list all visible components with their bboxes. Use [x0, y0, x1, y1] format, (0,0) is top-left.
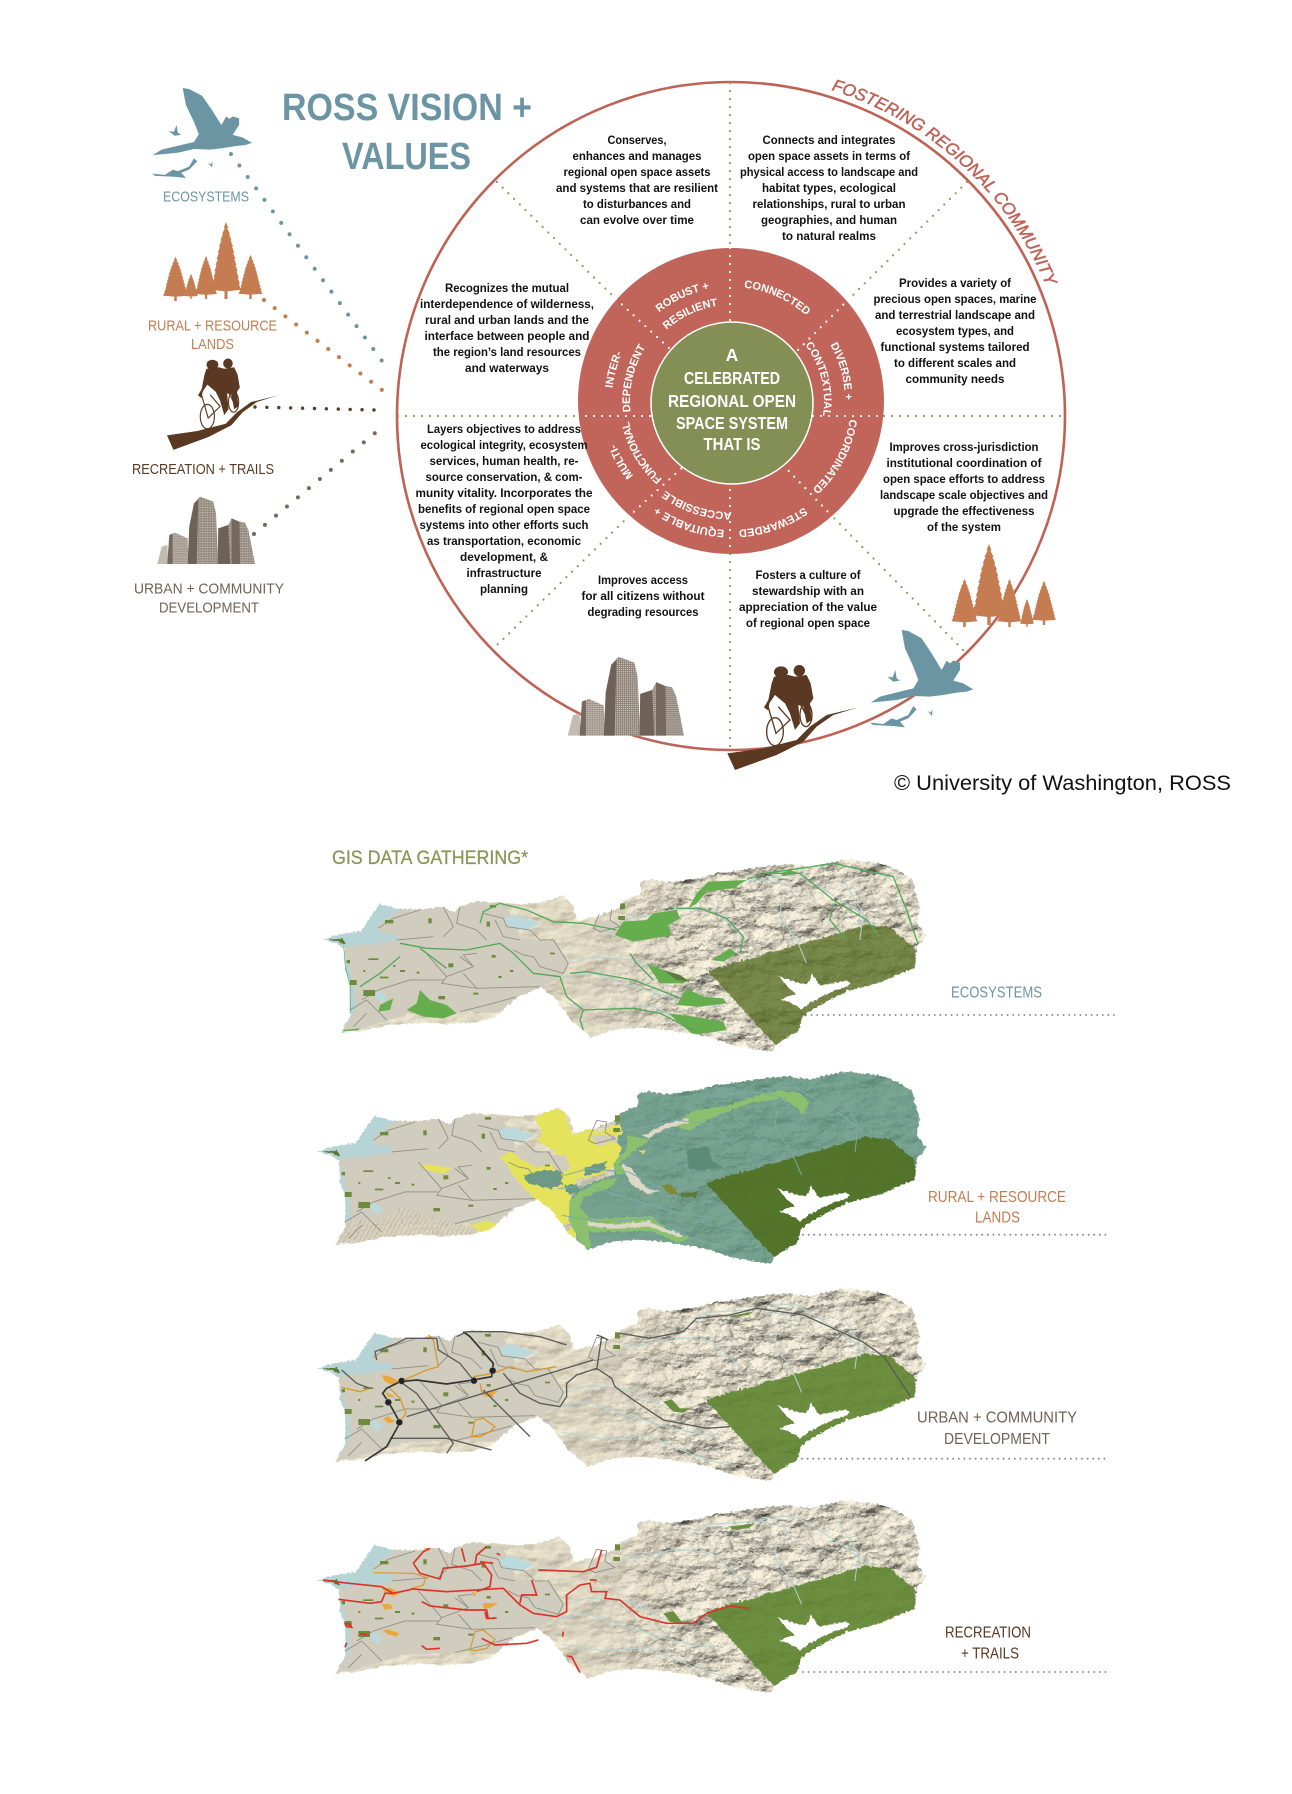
map: ecosystems — [322, 858, 1115, 1052]
icon: cyclists on branch — [167, 359, 278, 450]
connector dots: rural + resource lands — [264, 300, 382, 390]
label: recreation + trails — [945, 1625, 1031, 1663]
text block: diverse + contextual: precious open spaces, marine — [874, 294, 1036, 306]
text block: stewarded — [739, 570, 877, 630]
label: rural + resource lands — [148, 318, 277, 353]
ring labels: ROBUST + — [655, 283, 708, 312]
text block: coordinated: Improves cross-jurisdiction — [890, 442, 1038, 454]
text block: multi-functional: benefits of regional open space — [418, 504, 590, 516]
text block: multi-functional: development, & — [460, 552, 548, 564]
icon: birds — [152, 88, 252, 178]
curved heading: fostering regional community: FOSTERING REGIONAL COMMUNITY — [831, 80, 1058, 284]
icon: conifer trees — [163, 222, 262, 301]
label: ecosystems: ECOSYSTEMS — [163, 188, 249, 206]
label: rural + resource lands: RURAL + RESOURCE — [928, 1189, 1066, 1206]
text block: multi-functional: planning — [480, 584, 528, 596]
text block: diverse + contextual: ecosystem types, and — [896, 326, 1014, 338]
text block: multi-functional: services, human health, re- — [430, 456, 579, 468]
text block: connected: open space assets in terms of — [748, 151, 910, 163]
text block: multi-functional: munity vitality. Incorporates the — [416, 488, 592, 500]
label: urban + community development: DEVELOPMENT — [159, 600, 259, 617]
text block: stewarded: Fosters a culture of — [756, 570, 861, 582]
label: recreation + trails: + TRAILS — [961, 1646, 1019, 1663]
label: recreation + trails: RECREATION — [945, 1625, 1031, 1642]
label: rural + resource lands: LANDS — [191, 336, 234, 353]
copyright note: © University of Washington, ROSS — [894, 772, 1231, 795]
ring labels — [605, 280, 857, 538]
text block: interdependent: rural and urban lands and the — [425, 315, 589, 327]
label: rural + resource lands: RURAL + RESOURCE — [148, 318, 277, 334]
map: urban + community development — [317, 1288, 1106, 1481]
icon: wheel conifer trees — [952, 544, 1056, 627]
text block: coordinated: landscape scale objectives and — [880, 490, 1048, 502]
text block: robust + resilient: regional open space assets — [564, 167, 710, 179]
text block: diverse + contextual: and terrestrial landscape and — [875, 310, 1035, 322]
label: urban + community development: URBAN + COMMUNITY — [134, 580, 284, 597]
text block: equitable + accessible: Improves access — [598, 575, 688, 587]
text block: multi-functional: infrastructure — [466, 568, 542, 580]
map: rural + resource lands — [317, 1070, 1106, 1264]
text block: coordinated: of the system — [927, 522, 1001, 534]
heading: GIS data gathering: GIS DATA GATHERING* — [332, 847, 528, 869]
text block: diverse + contextual: to different scales and — [894, 358, 1016, 370]
text block: connected: geographies, and human — [761, 215, 897, 227]
text block: connected — [740, 135, 918, 243]
icon: wheel birds — [870, 630, 973, 727]
text block: coordinated: open space efforts to address — [883, 474, 1045, 486]
text block: multi-functional: Layers objectives to address — [427, 424, 581, 436]
map: recreation + trails — [317, 1500, 1106, 1693]
text block: interdependent — [420, 283, 594, 375]
icon: wheel city buildings — [568, 657, 684, 736]
ring labels: DIVERSE + — [830, 342, 852, 400]
text block: coordinated: upgrade the effectiveness — [894, 506, 1034, 518]
centre text: CELEBRATED — [684, 368, 780, 388]
chart: values wheel — [396, 80, 1066, 770]
connector dots: recreation + trails — [255, 407, 374, 410]
ring labels: EQUITABLE + — [655, 508, 724, 538]
text block: coordinated — [880, 442, 1048, 534]
connector dots: urban + community development — [254, 433, 375, 534]
ring labels: STEWARDED — [739, 508, 808, 537]
centre circle — [651, 322, 813, 484]
ring labels: COORDINATED — [814, 420, 857, 493]
text block: interdependent: and waterways — [465, 363, 549, 375]
label: recreation + trails: RECREATION + TRAILS — [132, 461, 274, 478]
icon: city buildings — [157, 497, 255, 564]
text block: connected: Connects and integrates — [762, 135, 896, 147]
text block: stewarded: appreciation of the value — [739, 602, 877, 614]
text block: multi-functional: systems into other efforts such — [420, 520, 588, 532]
label: rural + resource lands — [928, 1189, 1066, 1227]
title — [282, 87, 532, 178]
label: urban + community development: DEVELOPMENT — [944, 1431, 1050, 1448]
text block: robust + resilient: enhances and manages — [572, 151, 702, 163]
text block: interdependent: interface between people and — [424, 331, 590, 343]
label: urban + community development — [917, 1410, 1077, 1448]
centre text: SPACE SYSTEM — [676, 413, 788, 433]
ring labels: CONTEXTUAL — [806, 342, 832, 416]
label: rural + resource lands: LANDS — [975, 1210, 1020, 1227]
ring labels: DEPENDENT — [622, 343, 644, 412]
text block: robust + resilient — [556, 135, 718, 227]
centre text — [668, 345, 796, 454]
text block: equitable + accessible: degrading resources — [588, 607, 698, 619]
label: urban + community development — [134, 580, 284, 617]
centre text: A — [726, 345, 739, 365]
text block: interdependent: the region’s land resources — [433, 347, 581, 359]
centre text: THAT IS — [704, 434, 760, 454]
ring labels: INTER- — [605, 352, 620, 388]
icon: wheel cyclists on branch — [727, 665, 858, 770]
ring labels: CONNECTED — [744, 280, 810, 314]
text block: equitable + accessible — [582, 575, 705, 619]
ring labels: FUNCTIONAL — [622, 422, 662, 484]
text block: diverse + contextual: Provides a variety of — [899, 278, 1011, 290]
text block: stewarded: stewardship with an — [752, 586, 864, 598]
text block: multi-functional: as transportation, economic — [427, 536, 582, 548]
connector dots: ecosystems — [231, 154, 382, 361]
ring labels: MULTI- — [610, 445, 633, 480]
text block: connected: physical access to landscape and — [740, 167, 918, 179]
centre text: REGIONAL OPEN — [668, 391, 796, 411]
text block: robust + resilient: to disturbances and — [583, 199, 691, 211]
panel: left legend of four themes — [132, 88, 284, 617]
text block: robust + resilient: Conserves, — [608, 135, 666, 147]
ring labels: ACCESSIBLE — [662, 490, 732, 520]
label: ecosystems: ECOSYSTEMS — [951, 985, 1042, 1002]
title: ROSS VISION + — [282, 87, 532, 129]
text block: interdependent: interdependence of wilderness, — [420, 299, 594, 311]
outer circle — [397, 82, 1065, 750]
transit stations — [385, 1367, 496, 1426]
title: VALUES — [342, 136, 471, 178]
text block: diverse + contextual: community needs — [906, 374, 1004, 386]
text block: robust + resilient: and systems that are resilient — [556, 183, 718, 195]
text block: interdependent: Recognizes the mutual — [445, 283, 569, 295]
label: urban + community development: URBAN + COMMUNITY — [917, 1410, 1077, 1427]
text block: diverse + contextual — [874, 278, 1036, 386]
text block: connected: habitat types, ecological — [762, 183, 896, 195]
text block: coordinated: institutional coordination of — [886, 458, 1042, 470]
ring labels: RESILIENT — [662, 298, 716, 330]
text block: robust + resilient: can evolve over time — [580, 215, 694, 227]
text block: multi-functional: source conservation, & com- — [426, 472, 583, 484]
text block: multi-functional: ecological integrity, ecosystem — [420, 440, 588, 452]
text block: connected: relationships, rural to urban — [752, 199, 906, 211]
text block: stewarded: of regional open space — [746, 618, 870, 630]
ring of values — [578, 248, 884, 554]
text block: connected: to natural realms — [782, 231, 876, 243]
text block: multi-functional — [416, 424, 592, 596]
text block: diverse + contextual: functional systems tailored — [880, 342, 1030, 354]
text block: equitable + accessible: for all citizens without — [582, 591, 705, 603]
